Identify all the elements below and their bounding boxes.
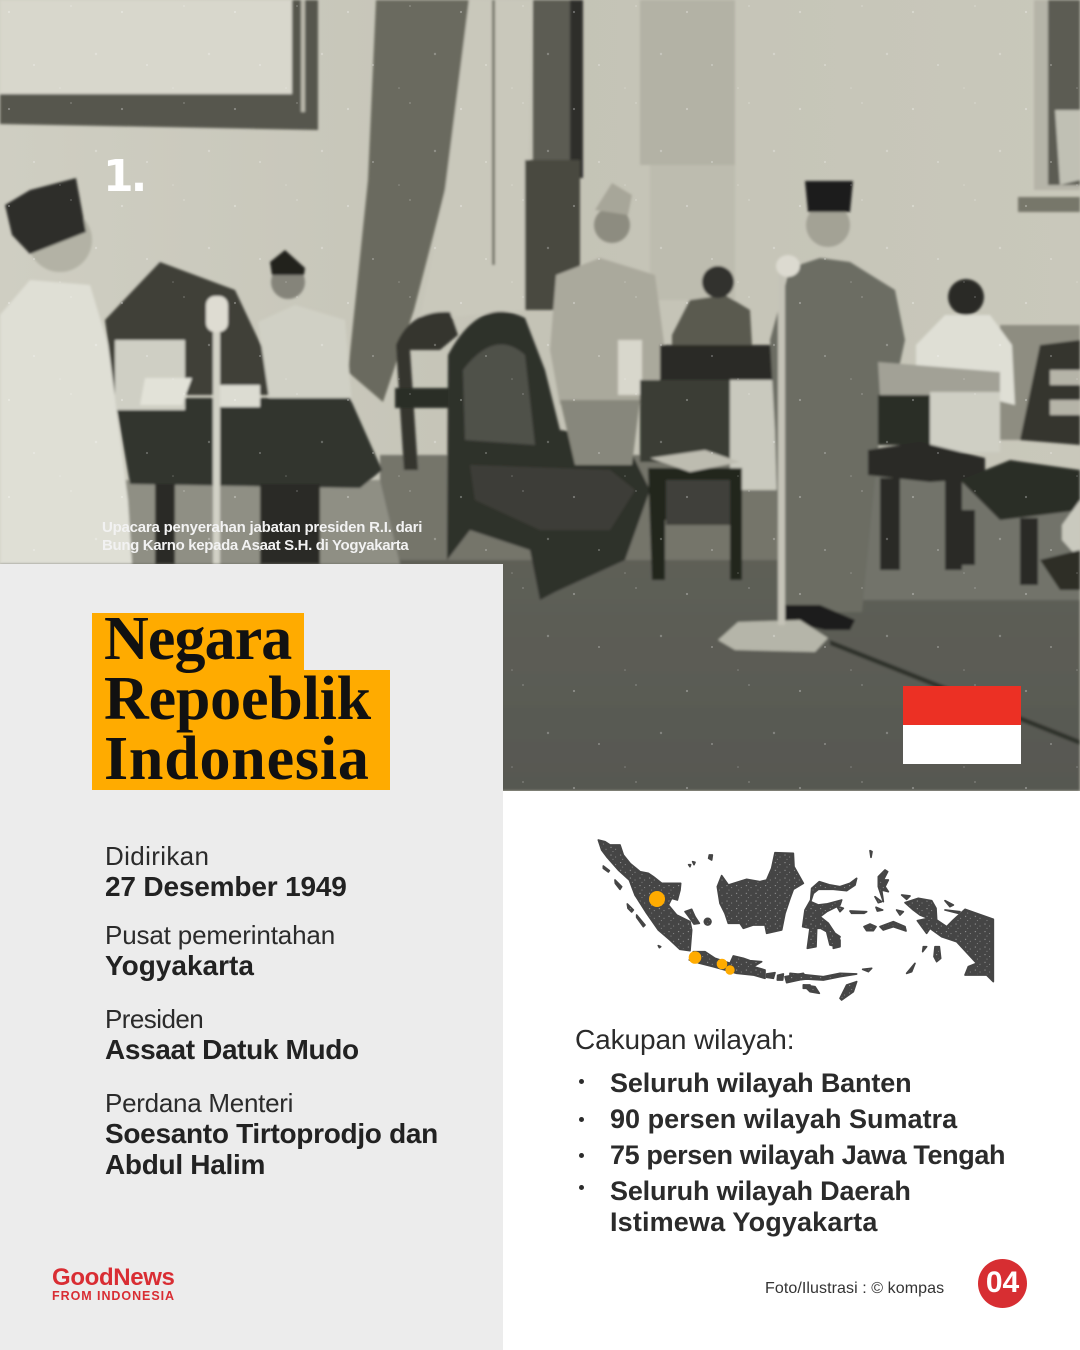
panel: grey info panel [0,564,503,1350]
list: coverage regions: Seluruh wilayah Daerah [610,1176,911,1206]
text block: pusat pemerintahan: Yogyakarta [105,950,254,981]
logo: GoodNews from Indonesia: FROM INDONESIA [52,1289,175,1303]
text block: didirikan: Didirikan [105,841,209,871]
heading: cakupan wilayah: Cakupan wilayah: [575,1024,794,1055]
photo: ceremony [0,0,1080,791]
title with highlight: Indonesia [104,725,370,793]
text block: perdana menteri: Perdana Menteri [105,1088,293,1118]
title with highlight [92,605,390,793]
page number [978,1259,1027,1308]
text block: didirikan: 27 Desember 1949 [105,871,347,902]
logo: GoodNews from Indonesia: GoodNews [52,1264,175,1291]
list: coverage regions: 90 persen wilayah Sumatra [610,1104,957,1134]
credit: Foto/Ilustrasi : © kompas [765,1280,944,1297]
text block: pusat pemerintahan: Pusat pemerintahan [105,920,335,950]
islands: east [790,851,993,1000]
highlighted locations [649,891,735,975]
text block: perdana menteri: Abdul Halim [105,1149,265,1180]
text block: presiden: Presiden [105,1004,203,1034]
list: coverage regions: Seluruh wilayah Banten [610,1068,912,1098]
logo: GoodNews from Indonesia [52,1264,175,1303]
text block: perdana menteri [105,1088,438,1180]
photo caption: Bung Karno kepada Asaat S.H. di Yogyakarta [102,537,408,554]
text block: didirikan [105,841,347,902]
title with highlight: Negara [104,605,291,673]
number: 1.: 1. [103,151,144,202]
list: coverage regions: 75 persen wilayah Jawa Tengah [610,1140,1005,1170]
photo caption [102,519,422,554]
list: coverage regions [579,1068,1005,1237]
text block: perdana menteri: Soesanto Tirtoprodjo dan [105,1118,438,1149]
text block: pusat pemerintahan [105,920,335,981]
map: Indonesia coverage [598,839,994,1001]
photo caption: Upacara penyerahan jabatan presiden R.I. dari [102,519,422,536]
text block: presiden: Assaat Datuk Mudo [105,1034,359,1065]
text block: presiden [105,1004,359,1065]
page number: 04 [986,1266,1019,1299]
flag: Indonesia [903,686,1021,764]
list: coverage regions: Istimewa Yogyakarta [610,1207,877,1237]
title with highlight: Repoeblik [104,665,371,733]
islands: west [598,840,810,988]
